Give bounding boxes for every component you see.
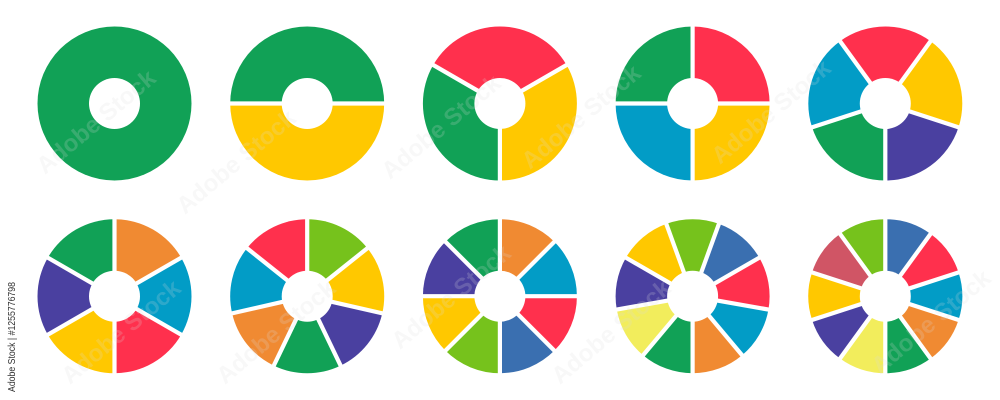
segment: red — [433, 27, 567, 104]
segment: green — [230, 26, 384, 103]
centre hole — [282, 78, 333, 129]
segment: purple — [812, 296, 885, 358]
centre hole — [667, 271, 718, 322]
segment: lime — [445, 296, 500, 373]
segment: lime — [840, 219, 885, 296]
centre hole — [474, 78, 525, 129]
segment: red — [693, 26, 770, 104]
centre hole — [860, 78, 911, 129]
watermarks: Adobe Stock — [377, 69, 507, 185]
segment: rose — [812, 234, 885, 296]
stock id caption: Adobe Stock | #1255776798 — [7, 282, 18, 392]
watermarks: Adobe Stock — [867, 264, 997, 380]
segment: blue — [616, 104, 693, 180]
segment: blue — [114, 258, 191, 335]
wheel: 3 segments — [423, 27, 577, 184]
wheel: 4 segments — [613, 24, 772, 183]
segment: red — [693, 258, 770, 310]
segment: orange — [693, 296, 742, 373]
segment: steel blue — [885, 219, 931, 296]
segment: yellow — [626, 224, 693, 296]
segment: yellow — [500, 65, 577, 180]
segment: yellow — [48, 296, 114, 373]
segment: purple — [307, 296, 382, 366]
segment: lime — [666, 219, 719, 296]
wheel: 1 segment — [38, 26, 192, 180]
centre hole — [860, 271, 911, 322]
segment: orange — [232, 296, 307, 366]
segment: orange — [885, 296, 959, 358]
segment: green — [445, 219, 500, 296]
wheel: 2 segments — [228, 26, 386, 180]
watermarks: Adobe Stock — [57, 274, 187, 390]
segment: orange — [500, 219, 554, 296]
segment: yellow — [693, 104, 770, 180]
segment: lime — [307, 219, 367, 296]
segment: red — [885, 234, 959, 296]
segment: green — [48, 219, 114, 296]
watermarks: Adobe Stock — [547, 274, 677, 390]
wheel: 5 segments — [808, 27, 962, 183]
segment: purple — [885, 104, 959, 180]
segment: steel blue — [693, 224, 759, 296]
segment: orange — [114, 219, 181, 296]
segment: blue — [693, 296, 768, 355]
segment: yellow — [230, 104, 384, 180]
segment: blue — [885, 272, 962, 320]
watermarks: Adobe Stock — [387, 239, 517, 355]
segment: yellow — [885, 41, 962, 127]
centre hole — [474, 271, 525, 322]
wheel: 7 segments — [229, 216, 385, 373]
wheel: 10 segments — [808, 216, 962, 376]
segment: yellow — [423, 296, 500, 351]
centre hole — [667, 78, 718, 129]
watermarks: Adobe Stock — [32, 64, 162, 180]
segment: blue — [808, 41, 885, 127]
segment: purple — [38, 258, 115, 335]
segment: red — [500, 296, 577, 351]
wheel: 9 segments — [614, 219, 771, 376]
segment: blue — [230, 248, 307, 313]
segment: green — [643, 296, 693, 373]
watermarks: Adobe Stock — [517, 59, 647, 175]
segment: blue — [500, 242, 577, 296]
segment: steel blue — [500, 296, 554, 373]
segment: green ring — [38, 26, 192, 180]
segment: light yellow — [617, 296, 693, 355]
segment: green — [885, 296, 931, 373]
watermarks: Adobe Stock — [212, 274, 342, 390]
centre hole — [89, 271, 140, 322]
segment: purple — [423, 242, 500, 296]
segment: red — [840, 27, 931, 103]
wheel: 6 segments — [38, 216, 191, 376]
wheel: 8 segments — [420, 216, 580, 376]
segment: purple — [616, 258, 693, 310]
segment: yellow — [808, 272, 885, 320]
watermarks: Adobe Stock — [172, 104, 302, 220]
segment: light yellow — [840, 296, 885, 373]
segment: red — [247, 219, 307, 296]
centre hole — [282, 271, 333, 322]
segment: green — [274, 296, 341, 373]
centre hole — [89, 78, 140, 129]
segment: green — [616, 26, 693, 104]
segment: green — [812, 104, 885, 180]
segment: yellow — [307, 248, 384, 313]
segment: green — [423, 65, 500, 180]
segment: red — [114, 296, 181, 373]
watermarks: Adobe Stock — [707, 54, 837, 170]
